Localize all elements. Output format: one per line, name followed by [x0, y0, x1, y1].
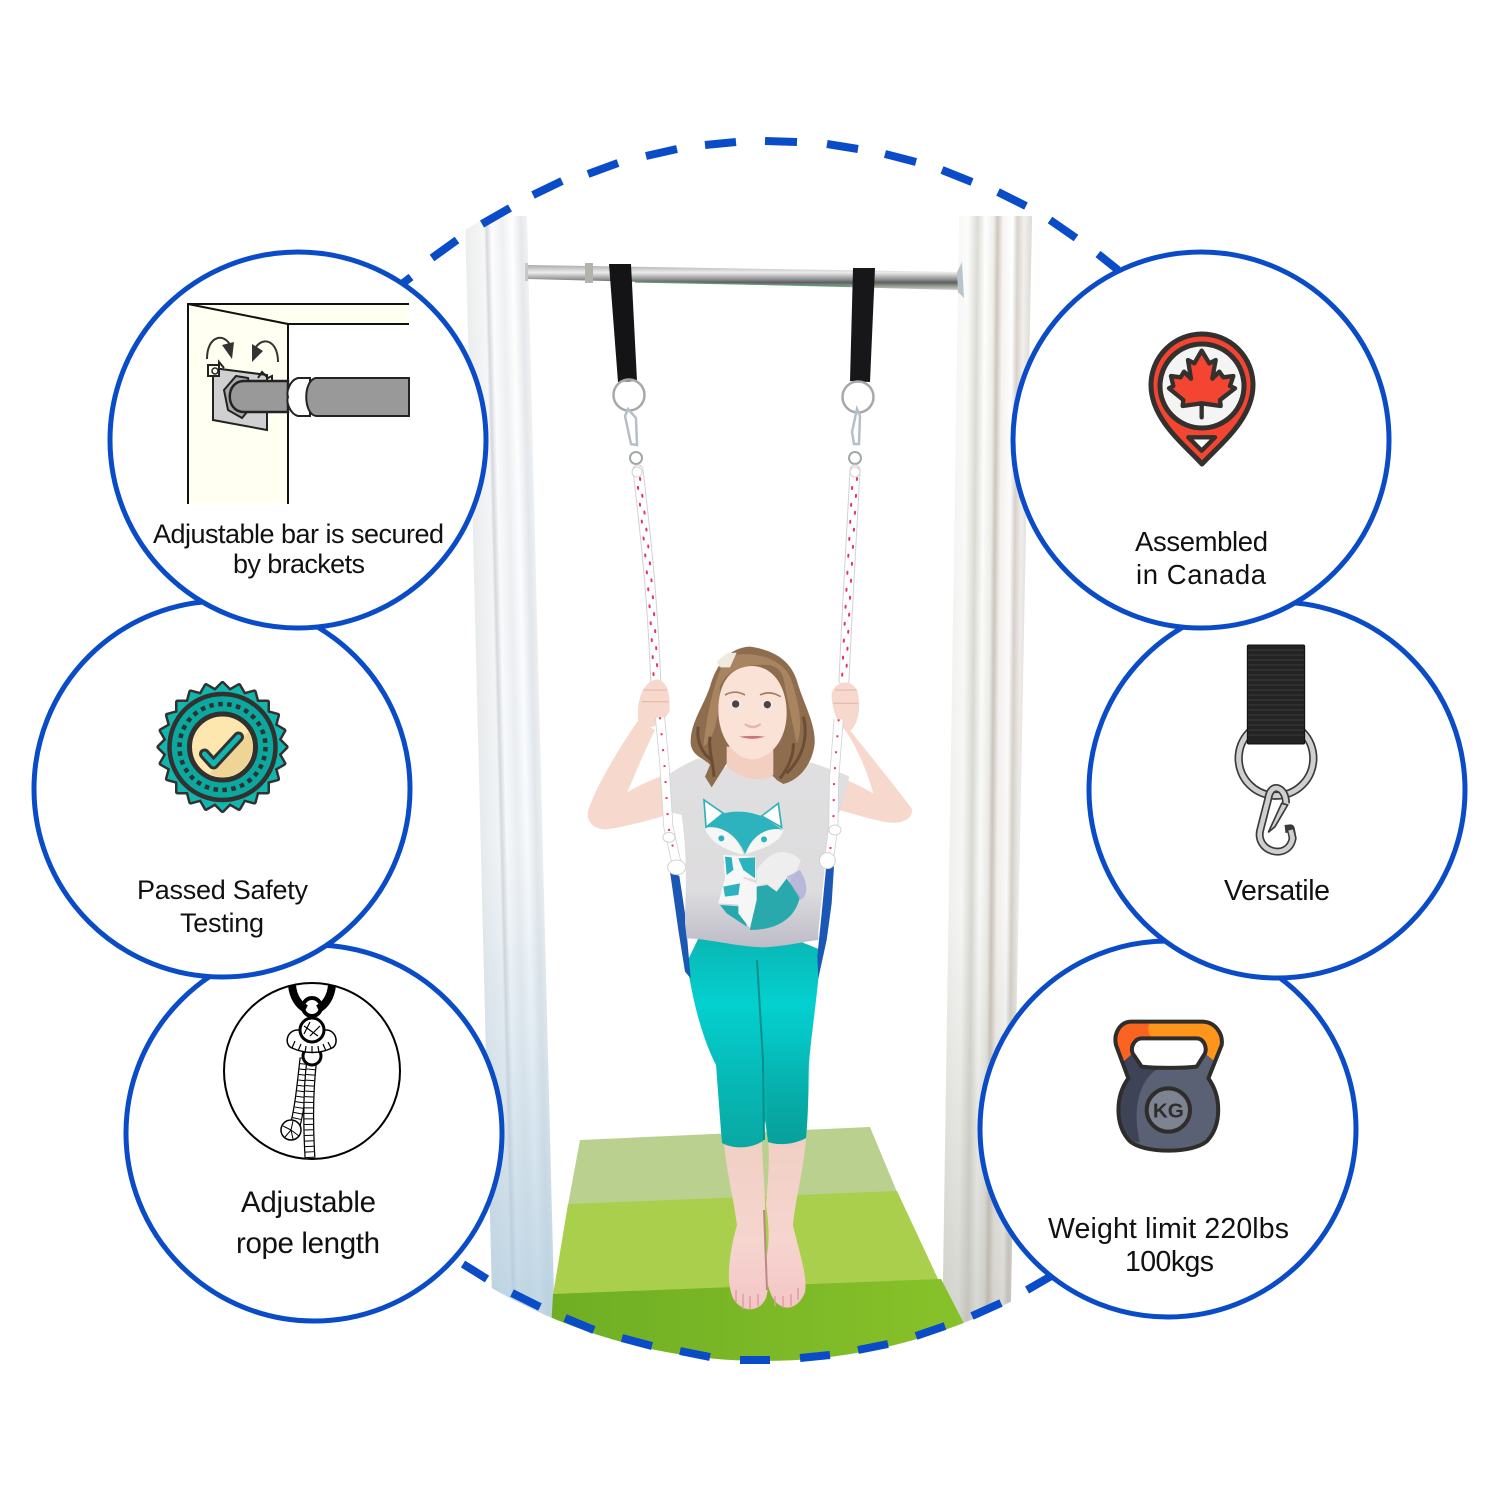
face	[718, 666, 787, 759]
label: Passed Safety	[137, 875, 308, 905]
photo: girl on swing in door frame	[465, 216, 1032, 1380]
lower ropes and knots	[660, 717, 841, 875]
left strap and ring	[609, 264, 644, 464]
door frame right	[942, 216, 1032, 1366]
icon: rope and ring	[224, 983, 400, 1159]
feature circle: assembled in Canada	[1013, 252, 1389, 628]
feature circle: adjustable rope length	[126, 945, 502, 1321]
label: Testing	[180, 908, 264, 938]
hair clip	[717, 653, 737, 667]
green mat	[551, 1127, 970, 1380]
icon: strap and carabiner	[1239, 645, 1313, 852]
icon: safety badge	[159, 683, 286, 811]
label: Adjustable bar is secured	[153, 519, 444, 549]
pull-up bar	[525, 262, 964, 298]
hair	[691, 647, 815, 787]
neck	[727, 747, 773, 780]
feature circle: passed safety testing	[34, 601, 410, 977]
dashed outer circle	[402, 141, 1118, 1360]
label: Weight limit 220lbs	[1048, 1213, 1289, 1245]
label: in Canada	[1136, 559, 1267, 590]
eyes and features	[725, 692, 781, 739]
infographic canvas	[32, 137, 1468, 1364]
hair streaks	[698, 717, 805, 778]
icon: kettlebell: KG	[1153, 1100, 1184, 1123]
t-shirt	[668, 758, 849, 947]
feature circle: weight limit	[980, 941, 1356, 1317]
arms	[588, 679, 912, 829]
feature circle: versatile	[1089, 602, 1465, 978]
icon: kettlebell	[1115, 1022, 1222, 1151]
fox print	[704, 800, 806, 930]
swing seat and upper body	[588, 647, 912, 978]
label: rope length	[236, 1227, 380, 1260]
feature circle: adjustable bar	[110, 252, 486, 628]
label: Assembled	[1135, 526, 1268, 557]
icon: bar bracket diagram	[188, 304, 409, 504]
door frame left	[465, 216, 556, 1366]
swing seat	[670, 866, 834, 978]
right strap and ring	[842, 268, 875, 464]
label: Versatile	[1224, 875, 1330, 907]
upper ropes	[632, 467, 860, 685]
girl legs and feet	[687, 925, 821, 1309]
icon: Canada map pin	[1151, 334, 1253, 464]
label: 100kgs	[1125, 1246, 1214, 1278]
label: by brackets	[233, 549, 365, 579]
hair highlight	[703, 654, 800, 747]
label: Adjustable	[241, 1186, 376, 1219]
